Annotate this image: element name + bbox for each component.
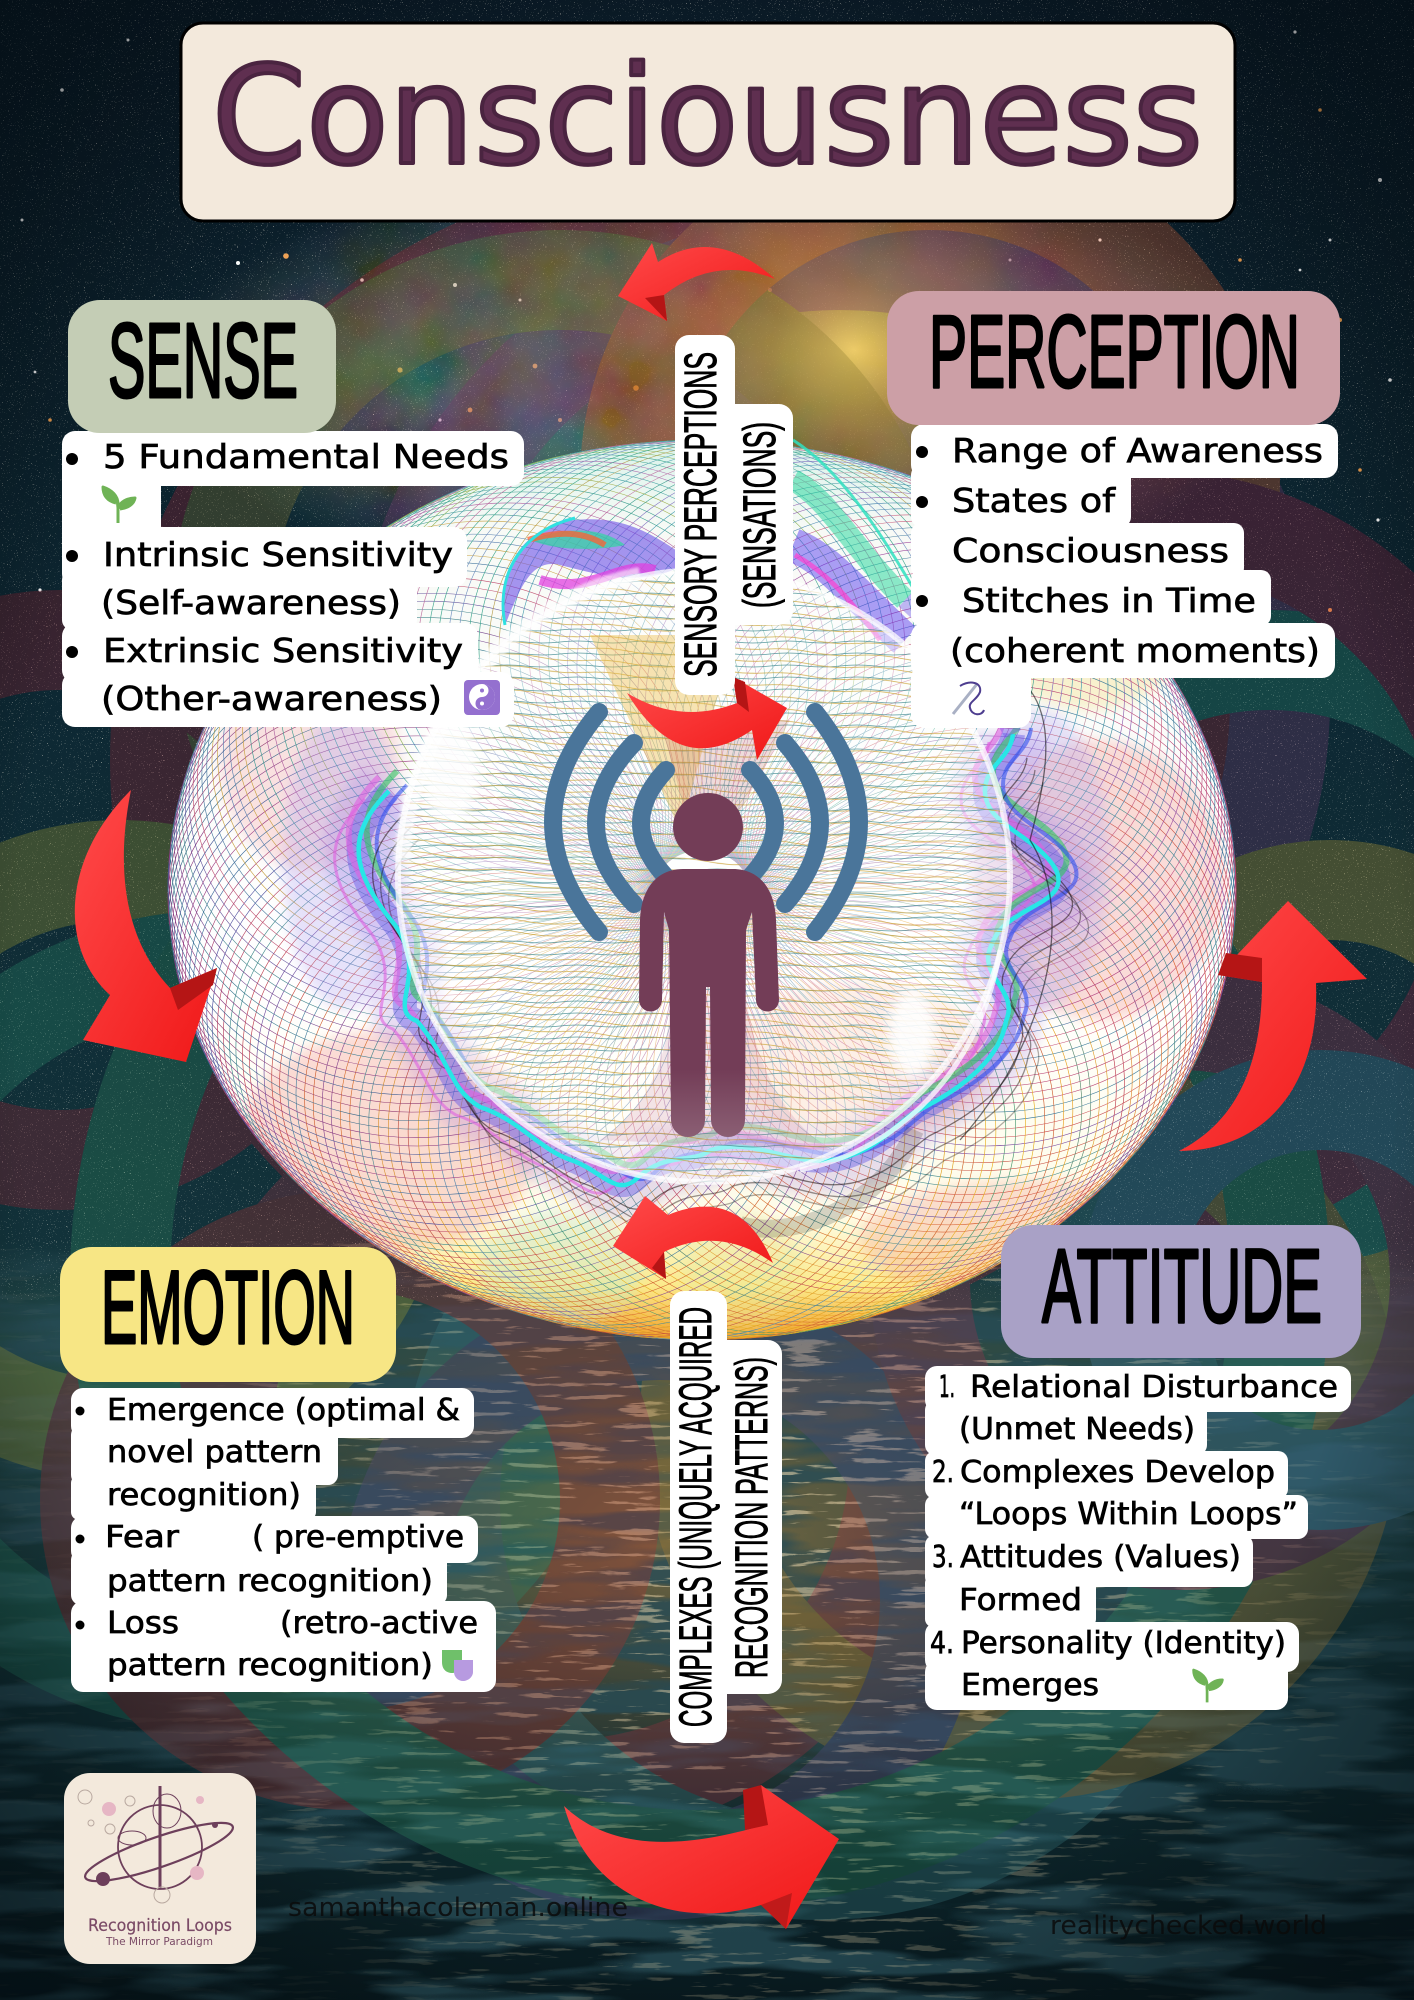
list: attitude: “Loops Within Loops”	[959, 1497, 1298, 1532]
list: emotion: Fear	[105, 1520, 180, 1555]
icon: signal waves radiating from figure	[553, 712, 859, 932]
title text: Consciousness	[212, 38, 1203, 196]
arrow: centre bottom, pointing left	[613, 1196, 773, 1279]
panel: sense	[62, 300, 524, 727]
list: attitude: 2.	[932, 1455, 954, 1490]
logo: recognition loops: The Mirror Paradigm	[105, 1935, 213, 1948]
list: attitude: 4.	[930, 1626, 954, 1661]
footer text: samanthacoleman.online: samanthacoleman.online	[288, 1893, 628, 1923]
list: emotion: novel pattern	[107, 1435, 322, 1470]
arrow: right, pointing up	[1179, 901, 1367, 1151]
glass bubble around the figure	[398, 570, 1010, 1182]
list: attitude	[930, 1370, 1338, 1703]
arrow: left, pointing down	[75, 790, 217, 1062]
heading: sense	[68, 300, 336, 433]
arrow: centre top, pointing right	[627, 677, 787, 760]
icon: sprout	[103, 487, 135, 523]
heading: sense: SENSE	[108, 302, 298, 420]
list: perception: Consciousness	[952, 531, 1229, 570]
list: sense: (Self-awareness)	[101, 583, 401, 622]
list: emotion: recognition)	[107, 1478, 301, 1513]
list: emotion: (retro-active	[280, 1606, 478, 1641]
text highlight: perception	[911, 424, 1338, 728]
list: attitude: Personality (Identity)	[961, 1626, 1286, 1661]
panel: attitude	[925, 1225, 1361, 1710]
rainbow energy ribbons	[283, 440, 1110, 1233]
list: emotion: ( pre-emptive	[252, 1520, 464, 1555]
footer text: realitychecked.world: realitychecked.world	[1050, 1911, 1327, 1941]
list: perception: Stitches in Time	[962, 581, 1256, 620]
heading: perception	[887, 291, 1340, 425]
list: sense: (Other-awareness)	[101, 679, 442, 718]
list: sense: Extrinsic Sensitivity	[103, 631, 463, 670]
panel: emotion	[60, 1247, 496, 1692]
text highlight: emotion	[71, 1388, 496, 1692]
list: emotion: pattern recognition)	[107, 1564, 433, 1599]
icon: yin yang	[464, 680, 500, 715]
list: attitude: Attitudes (Values)	[960, 1540, 1241, 1575]
list: perception: States of	[952, 481, 1117, 520]
title banner	[181, 23, 1235, 221]
list: perception: (coherent moments)	[950, 631, 1320, 670]
list: attitude: 1.	[939, 1370, 955, 1405]
vertical label: complexes: RECOGNITION PATTERNS)	[726, 1357, 777, 1678]
text highlight: attitude	[925, 1366, 1351, 1710]
list: attitude: Complexes Develop	[960, 1455, 1275, 1490]
vertical label: sensory perceptions (sensations)	[675, 335, 793, 695]
vertical label: complexes	[670, 1291, 782, 1743]
central spirograph torus	[168, 440, 1236, 1340]
list: attitude: Emerges	[961, 1668, 1099, 1703]
list: sense: Intrinsic Sensitivity	[103, 535, 453, 574]
logo: recognition loops: Recognition Loops	[88, 1916, 232, 1936]
list: emotion: pattern recognition)	[107, 1648, 433, 1683]
panel: perception	[887, 291, 1340, 728]
icon: needle and thread	[953, 683, 984, 714]
list: perception: Range of Awareness	[952, 431, 1323, 470]
heading: attitude	[1001, 1225, 1361, 1358]
list: sense	[66, 437, 509, 718]
list: perception	[916, 431, 1323, 670]
heading: emotion	[60, 1247, 396, 1382]
arrow: top, pointing left	[618, 243, 775, 321]
vertical label: complexes: COMPLEXES (UNIQUELY ACQUIRED	[670, 1307, 721, 1727]
vertical label: sensory perceptions (sensations): SENSORY PERCEPTIONS	[675, 352, 726, 677]
vertical label: sensory perceptions (sensations): (SENSATIONS)	[734, 422, 785, 608]
list: sense: 5 Fundamental Needs	[103, 437, 509, 476]
text highlight: sense	[62, 431, 524, 727]
heading: emotion: EMOTION	[101, 1250, 355, 1366]
logo mark	[78, 1786, 238, 1903]
list: emotion	[76, 1393, 478, 1683]
icon: theatre masks	[442, 1650, 473, 1681]
list: emotion: Loss	[107, 1606, 179, 1641]
logo: recognition loops	[64, 1773, 256, 1964]
list: attitude: 3.	[932, 1540, 954, 1575]
list: emotion: Emergence (optimal &	[107, 1393, 460, 1428]
list: attitude: Formed	[959, 1583, 1082, 1618]
icon: human figure	[639, 793, 779, 1137]
arrow: bottom, pointing right	[564, 1785, 839, 1929]
list: attitude: Relational Disturbance	[970, 1370, 1338, 1405]
icon: sprout	[1194, 1670, 1222, 1702]
list: attitude: (Unmet Needs)	[959, 1412, 1195, 1447]
